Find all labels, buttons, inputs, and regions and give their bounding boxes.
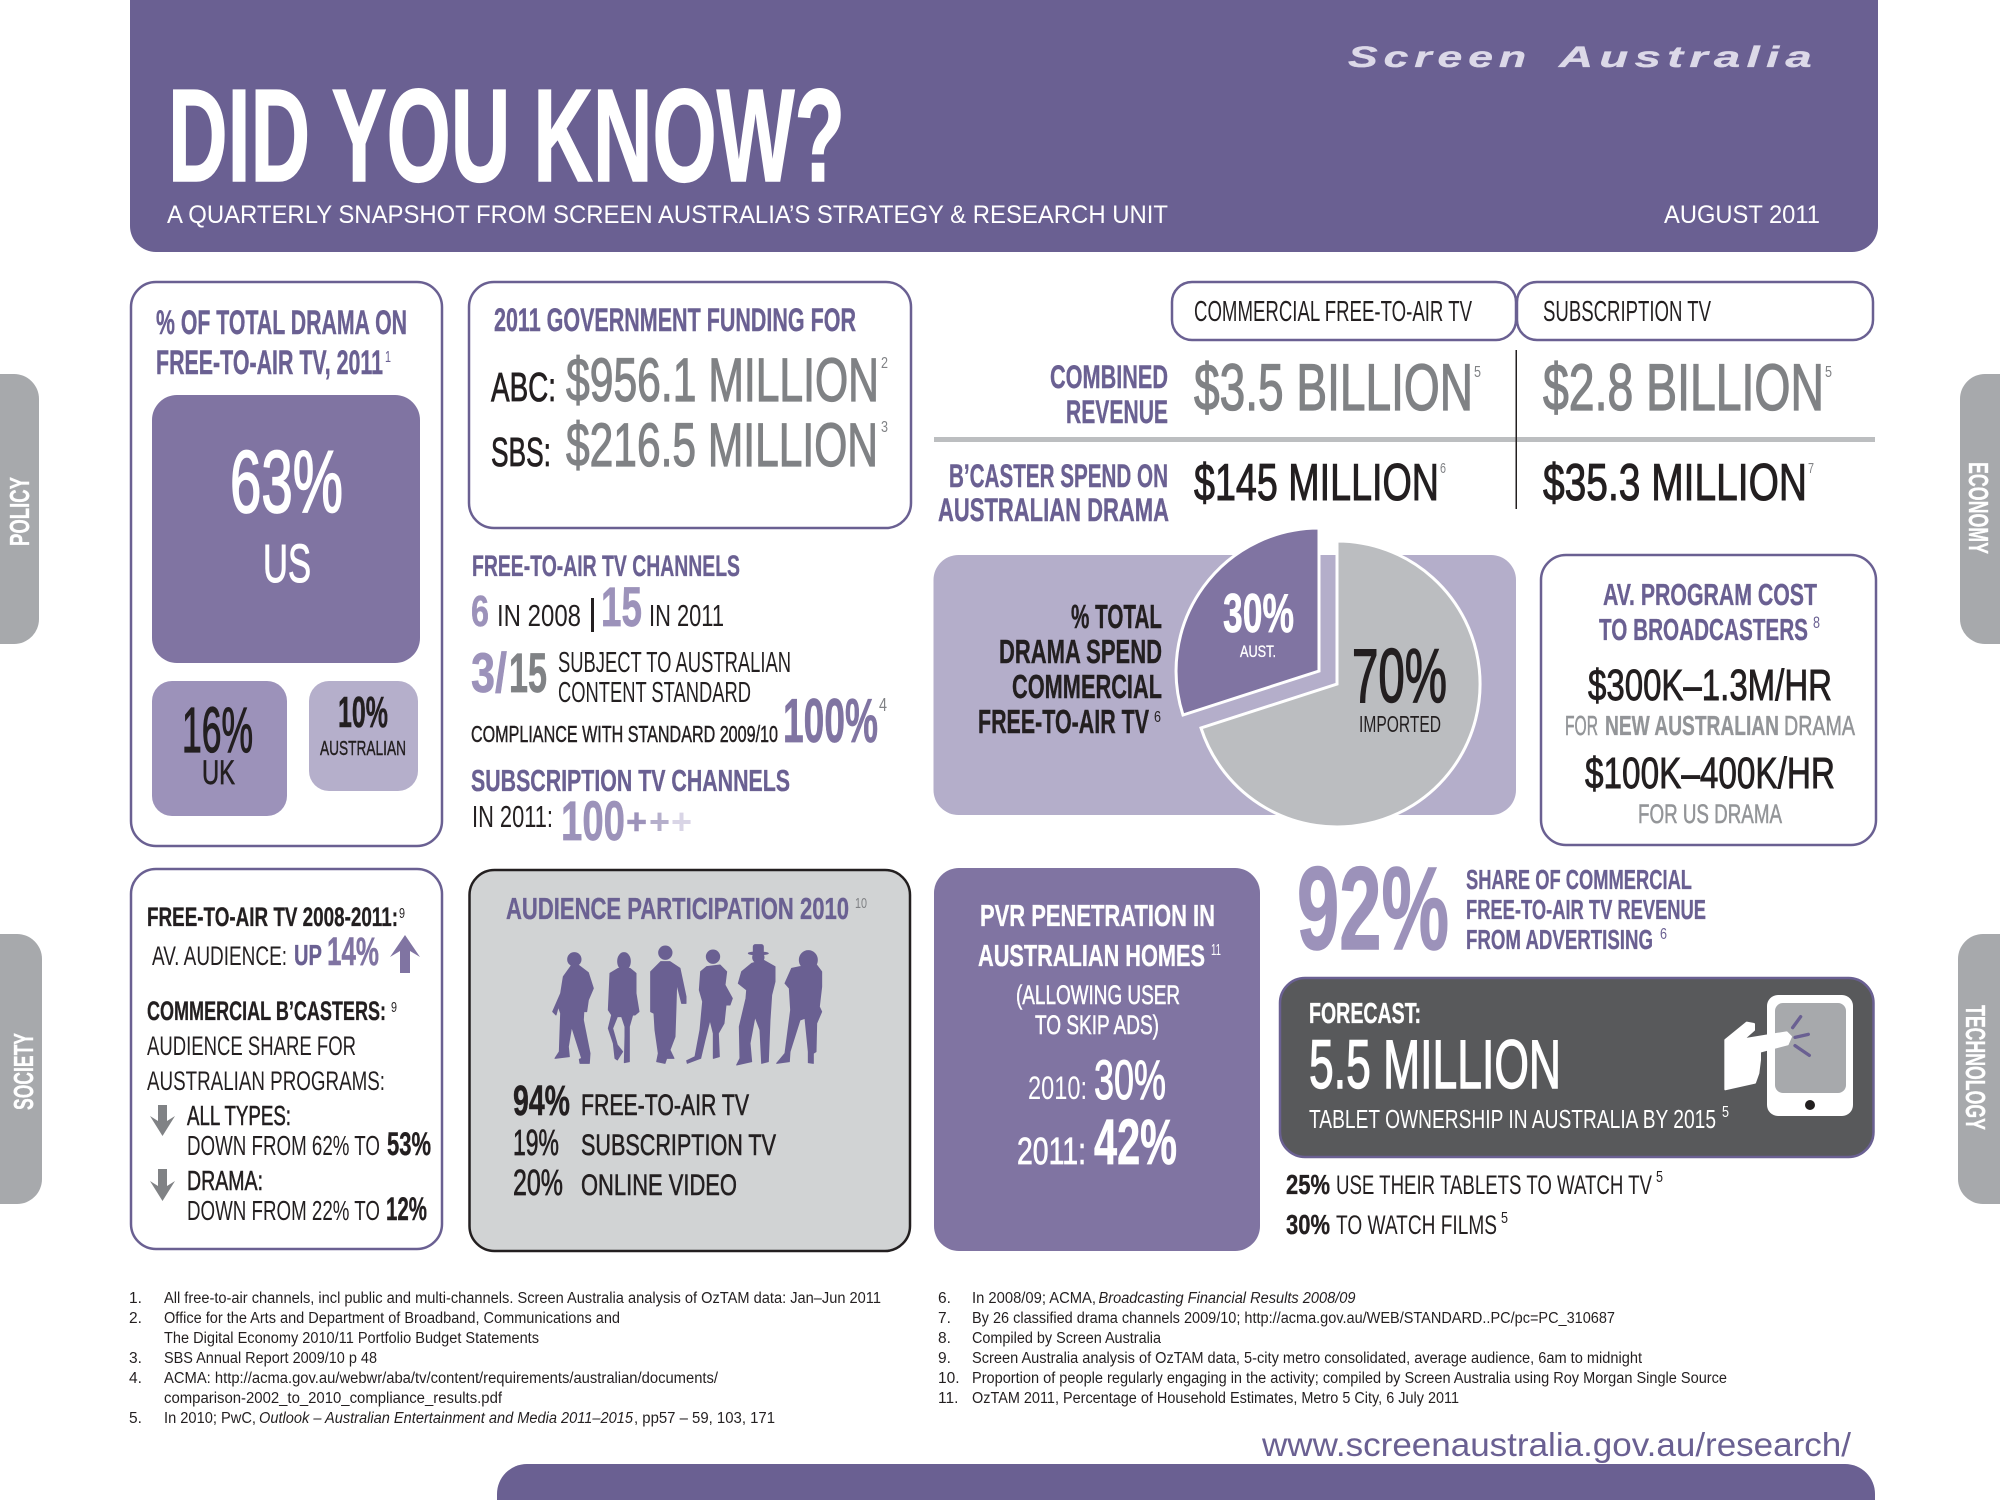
value: commercial spend: 6	[1440, 460, 1446, 477]
block: subscription channels: +	[671, 801, 692, 842]
logo: Screen Australia: Screen	[1348, 41, 1532, 74]
all types share: DOWN FROM 62% TO	[187, 1130, 380, 1161]
drama share: 12%	[386, 1191, 427, 1227]
stat: free-to-air 94%: 94%	[513, 1077, 570, 1125]
footnotes left: Office for the Arts and Department of Broadband, Communications and	[164, 1310, 620, 1327]
commercial broadcasters: AUDIENCE SHARE FOR	[147, 1031, 356, 1061]
label: total drama spend: % TOTAL	[1071, 598, 1162, 635]
label: total drama spend	[978, 598, 1162, 740]
callout: 92% advertising share: FROM ADVERTISING	[1466, 924, 1653, 955]
channel counts: IN 2008	[497, 598, 581, 633]
row label: combined revenue: REVENUE	[1066, 394, 1168, 430]
side tab: society: SOCIETY	[8, 1033, 39, 1110]
footnotes right: 8.	[938, 1330, 951, 1347]
value: subscription revenue: $2.8 BILLION	[1543, 350, 1824, 424]
column header: commercial free-to-air	[1172, 282, 1516, 340]
stat: free-to-air 94%: FREE-TO-AIR TV	[581, 1089, 749, 1122]
cost: Australian drama: NEW AUSTRALIAN	[1605, 710, 1779, 741]
footer bar	[497, 1464, 1875, 1500]
panel: government funding	[469, 282, 911, 528]
stat: subscription 19%	[513, 1122, 776, 1163]
stat: 2010 30%: 2010:	[1028, 1070, 1087, 1106]
cost: Australian drama: DRAMA	[1784, 710, 1855, 741]
column header: commercial free-to-air: COMMERCIAL FREE-TO-AIR TV	[1194, 296, 1472, 328]
side tab: economy	[1960, 374, 2000, 644]
label: total drama spend: COMMERCIAL	[1012, 668, 1162, 705]
pie chart: IMPORTED	[1359, 711, 1441, 737]
forecast text: FORECAST:	[1309, 998, 1421, 1030]
tile: US 63%	[152, 395, 420, 663]
ABC funding: $956.1 MILLION	[566, 346, 879, 414]
icon: up arrow	[390, 935, 420, 973]
footnotes right: 9.	[938, 1350, 951, 1367]
footnotes right: In 2008/09; ACMA,	[972, 1290, 1096, 1307]
SBS funding: $216.5 MILLION	[566, 411, 878, 479]
footnotes left	[129, 1290, 881, 1427]
footnotes left: 1.	[129, 1290, 142, 1307]
block: subscription channels: +	[626, 801, 647, 842]
average audience: UP	[294, 940, 322, 972]
heading: PVR penetration	[978, 898, 1221, 973]
SBS funding: SBS:	[491, 429, 551, 475]
stats: tablet use: 5	[1501, 1210, 1508, 1227]
heading: share of drama: 1	[385, 349, 391, 366]
row label: broadcaster spend: B’CASTER SPEND ON	[949, 458, 1168, 494]
stat: online video 20%	[513, 1162, 737, 1203]
stat: subscription 19%: 19%	[513, 1122, 559, 1163]
footnotes left: 2.	[129, 1310, 142, 1327]
commercial broadcasters: COMMERCIAL B’CASTERS:	[147, 996, 386, 1026]
stats: tablet use	[1286, 1169, 1663, 1240]
forecast text: TABLET OWNERSHIP IN AUSTRALIA BY 2015	[1309, 1104, 1716, 1134]
channel counts	[471, 575, 724, 638]
heading: free-to-air channels: FREE-TO-AIR TV CHANNELS	[472, 550, 740, 583]
side tab: policy: POLICY	[4, 477, 35, 546]
footnotes right: 11.	[938, 1390, 958, 1407]
stat: free-to-air 94%	[513, 1077, 749, 1125]
footnotes right: Screen Australia analysis of OzTAM data, 5-city metro consolidated, average audience, 6am to midnight	[972, 1350, 1643, 1367]
stat: 2010 30%: 30%	[1094, 1048, 1166, 1111]
logo: Screen Australia: Australia	[1557, 41, 1818, 74]
row label: combined revenue	[1050, 359, 1168, 430]
heading: PVR penetration: PVR PENETRATION IN	[980, 898, 1215, 933]
average audience: FREE-TO-AIR TV 2008-2011:	[147, 902, 398, 932]
stat: 2011 42%	[1017, 1106, 1177, 1178]
stat: 2011 42%: 2011:	[1017, 1131, 1086, 1173]
callout: 92% advertising share: 6	[1660, 926, 1667, 943]
all types share: ALL TYPES:	[187, 1100, 291, 1131]
SBS funding	[491, 411, 888, 479]
heading: audience participation: AUDIENCE PARTICIPATION 2010	[506, 891, 849, 926]
tile: US 63%: 63%	[230, 432, 343, 531]
date: AUGUST 2011	[1664, 201, 1820, 229]
tile: UK 16%: UK	[202, 754, 235, 792]
drama share: DOWN FROM 22% TO	[187, 1195, 380, 1226]
block: subscription channels: +	[649, 801, 670, 842]
block: free-to-air channels	[471, 550, 887, 756]
heading: audience participation: 10	[855, 895, 867, 912]
title: DID YOU KNOW?	[168, 62, 845, 209]
ABC funding: ABC:	[491, 364, 556, 410]
block: subscription channels: IN 2011:	[472, 799, 553, 834]
panel: audience participation	[470, 870, 910, 1251]
logo: Screen Australia	[1348, 41, 1818, 74]
drama share: DRAMA:	[187, 1165, 263, 1196]
cost: Australian drama: $300K–1.3M/HR	[1588, 661, 1832, 710]
website url: www.screenaustralia.gov.au/research/	[1261, 1426, 1852, 1463]
tile: Australian 10%	[309, 681, 418, 791]
row label: broadcaster spend: AUSTRALIAN DRAMA	[938, 492, 1169, 528]
footnotes left: 5.	[129, 1410, 142, 1427]
stats: tablet use: USE THEIR TABLETS TO WATCH TV	[1336, 1170, 1652, 1200]
stats: tablet use: 5	[1656, 1169, 1663, 1186]
content standard: 3/	[471, 641, 507, 704]
callout: 92% advertising share	[1297, 843, 1706, 975]
icon: down arrow all types	[150, 1105, 175, 1136]
footnotes left: 4.	[129, 1370, 142, 1387]
side tab: technology: TECHNOLOGY	[1960, 1005, 1991, 1130]
stats: tablet use: 25%	[1286, 1169, 1330, 1200]
column header: subscription: SUBSCRIPTION TV	[1543, 296, 1711, 328]
value: commercial revenue: 5	[1474, 364, 1481, 381]
footnotes right: 10.	[938, 1370, 960, 1387]
block: subscription channels: SUBSCRIPTION TV CHANNELS	[471, 763, 790, 798]
footnotes left: In 2010; PwC,	[164, 1410, 256, 1427]
heading: PVR penetration: 11	[1211, 942, 1221, 959]
compliance: 100%	[783, 687, 878, 756]
stat: 2011 42%: 42%	[1094, 1106, 1177, 1178]
label: total drama spend: FREE-TO-AIR TV	[978, 703, 1149, 740]
cost: US drama: $100K–400K/HR	[1585, 749, 1835, 798]
heading: program cost: 8	[1813, 613, 1820, 632]
pie chart: 70%	[1352, 634, 1447, 719]
panel: tablet forecast	[1280, 978, 1874, 1157]
average audience: AV. AUDIENCE:	[152, 941, 287, 971]
icon: hand touching tablet	[1725, 995, 1853, 1116]
footnotes right: Compiled by Screen Australia	[972, 1330, 1161, 1347]
side tab: society	[0, 934, 42, 1204]
callout: 92% advertising share: FREE-TO-AIR TV REVENUE	[1466, 894, 1706, 925]
side tab: technology	[1958, 934, 2000, 1204]
forecast text	[1309, 998, 1729, 1134]
cost: Australian drama: FOR	[1565, 710, 1598, 741]
tile: US 63%: US	[263, 534, 311, 594]
side tab: economy: ECONOMY	[1963, 462, 1994, 554]
tile: Australian 10%: 10%	[338, 688, 388, 737]
footnotes right: 7.	[938, 1310, 951, 1327]
footnotes left: The Digital Economy 2010/11 Portfolio Budget Statements	[164, 1330, 539, 1347]
note: allowing user to skip ads	[1016, 980, 1180, 1040]
stats: tablet use: TO WATCH FILMS	[1336, 1210, 1497, 1240]
value: commercial revenue: $3.5 BILLION	[1194, 350, 1473, 424]
label: total drama spend: 6	[1154, 709, 1161, 726]
drama share	[187, 1165, 427, 1227]
tile: UK 16%	[152, 681, 287, 816]
heading: program cost	[1599, 577, 1820, 647]
content standard: 15	[509, 641, 547, 704]
subtitle: A QUARTERLY SNAPSHOT FROM SCREEN AUSTRALIA’S STRATEGY & RESEARCH UNIT	[167, 201, 1168, 229]
SBS funding: 3	[881, 419, 888, 436]
compliance: 4	[879, 695, 887, 715]
commercial broadcasters: AUSTRALIAN PROGRAMS:	[147, 1066, 385, 1096]
all types share: 53%	[387, 1126, 431, 1162]
footnotes right: 6.	[938, 1290, 951, 1307]
forecast text: 5	[1722, 1104, 1729, 1121]
heading: share of drama: FREE-TO-AIR TV, 2011	[156, 344, 383, 382]
footnotes right: Proportion of people regularly engaging in the activity; compiled by Screen Australia using Roy Morgan Single Source	[972, 1370, 1727, 1387]
content standard: SUBJECT TO AUSTRALIAN	[558, 647, 791, 679]
panel: free-to-air audience	[131, 869, 442, 1249]
heading: share of drama	[156, 304, 407, 382]
content standard	[471, 641, 791, 709]
average audience: 9	[399, 905, 405, 922]
footnotes left: , pp57 – 59, 103, 171	[634, 1410, 775, 1427]
value: commercial spend: $145 MILLION	[1194, 454, 1439, 512]
row label: combined revenue: COMBINED	[1050, 359, 1168, 395]
header banner	[130, 0, 1878, 252]
pie chart: AUST.	[1240, 642, 1276, 661]
heading: program cost: TO BROADCASTERS	[1599, 612, 1808, 647]
channel counts: IN 2011	[649, 598, 724, 633]
compliance	[471, 687, 887, 756]
forecast text: 5.5 MILLION	[1309, 1026, 1561, 1103]
ABC funding: 2	[881, 355, 888, 372]
heading: share of drama: % OF TOTAL DRAMA ON	[156, 304, 407, 342]
footnotes right: By 26 classified drama channels 2009/10; http://acma.gov.au/WEB/STANDARD..PC/pc=PC_310687	[972, 1310, 1615, 1327]
value: subscription spend: 7	[1808, 460, 1814, 477]
cost: US drama	[1585, 749, 1835, 829]
tile: Australian 10%: AUSTRALIAN	[320, 738, 406, 760]
panel: drama spend pie	[934, 528, 1516, 827]
panel: share of drama	[131, 282, 442, 846]
value: subscription revenue: 5	[1825, 364, 1832, 381]
side tab: policy	[0, 374, 39, 644]
footnotes right	[938, 1290, 1727, 1407]
note: allowing user to skip ads: (ALLOWING USER	[1016, 980, 1180, 1010]
average audience	[147, 902, 405, 974]
block: subscription channels: 100	[561, 789, 625, 852]
pie chart: 30%	[1223, 582, 1294, 644]
footnotes right: Broadcasting Financial Results 2008/09	[1098, 1290, 1356, 1307]
icon: six people silhouettes	[553, 945, 822, 1065]
commercial broadcasters	[147, 996, 397, 1096]
stat: online video 20%: 20%	[513, 1162, 563, 1203]
note: allowing user to skip ads: TO SKIP ADS)	[1035, 1010, 1159, 1040]
panel: program cost	[1541, 555, 1876, 845]
content standard: CONTENT STANDARD	[558, 677, 751, 709]
compliance: COMPLIANCE WITH STANDARD 2009/10	[471, 721, 778, 747]
block: subscription channels	[471, 763, 790, 852]
commercial broadcasters: 9	[391, 999, 397, 1016]
all types share	[187, 1100, 431, 1162]
icon: down arrow drama	[150, 1169, 175, 1201]
average audience: 14%	[327, 930, 379, 974]
footnotes right: OzTAM 2011, Percentage of Household Estimates, Metro 5 City, 6 July 2011	[972, 1390, 1459, 1407]
heading: program cost: AV. PROGRAM COST	[1603, 577, 1817, 612]
heading: government funding: 2011 GOVERNMENT FUNDING FOR	[494, 302, 856, 338]
cost: Australian drama	[1565, 661, 1855, 741]
tile: UK 16%: 16%	[182, 694, 253, 766]
row label: broadcaster spend	[938, 458, 1169, 528]
column header: subscription	[1517, 282, 1873, 340]
value: subscription spend: $35.3 MILLION	[1543, 454, 1807, 512]
pie chart	[1176, 528, 1480, 827]
footnotes left: 3.	[129, 1350, 142, 1367]
stats: tablet use: 30%	[1286, 1209, 1330, 1240]
callout: 92% advertising share: 92%	[1297, 843, 1449, 975]
callout: 92% advertising share: SHARE OF COMMERCIAL	[1466, 864, 1692, 895]
footnotes left: SBS Annual Report 2009/10 p 48	[164, 1350, 377, 1367]
cost: US drama: FOR US DRAMA	[1638, 799, 1782, 829]
revenue and spend table	[934, 282, 1875, 528]
footnotes left: ACMA: http://acma.gov.au/webwr/aba/tv/content/requirements/australian/documents/	[164, 1370, 719, 1387]
channel counts: 15	[601, 575, 642, 638]
panel: PVR penetration	[934, 868, 1260, 1251]
ABC funding	[491, 346, 888, 414]
stat: subscription 19%: SUBSCRIPTION TV	[581, 1129, 776, 1162]
stat: 2010 30%	[1028, 1048, 1166, 1111]
footnotes left: All free-to-air channels, incl public and multi-channels. Screen Australia analysis of OzTAM data: Jan–Jun 2011	[164, 1290, 881, 1307]
footnotes left: Outlook – Australian Entertainment and Media 2011–2015	[259, 1410, 633, 1427]
stat: online video 20%: ONLINE VIDEO	[581, 1169, 737, 1202]
heading: PVR penetration: AUSTRALIAN HOMES	[978, 938, 1205, 973]
footnotes left: comparison-2002_to_2010_compliance_results.pdf	[164, 1390, 503, 1407]
label: total drama spend: DRAMA SPEND	[999, 633, 1162, 670]
channel counts: 6	[471, 587, 489, 636]
